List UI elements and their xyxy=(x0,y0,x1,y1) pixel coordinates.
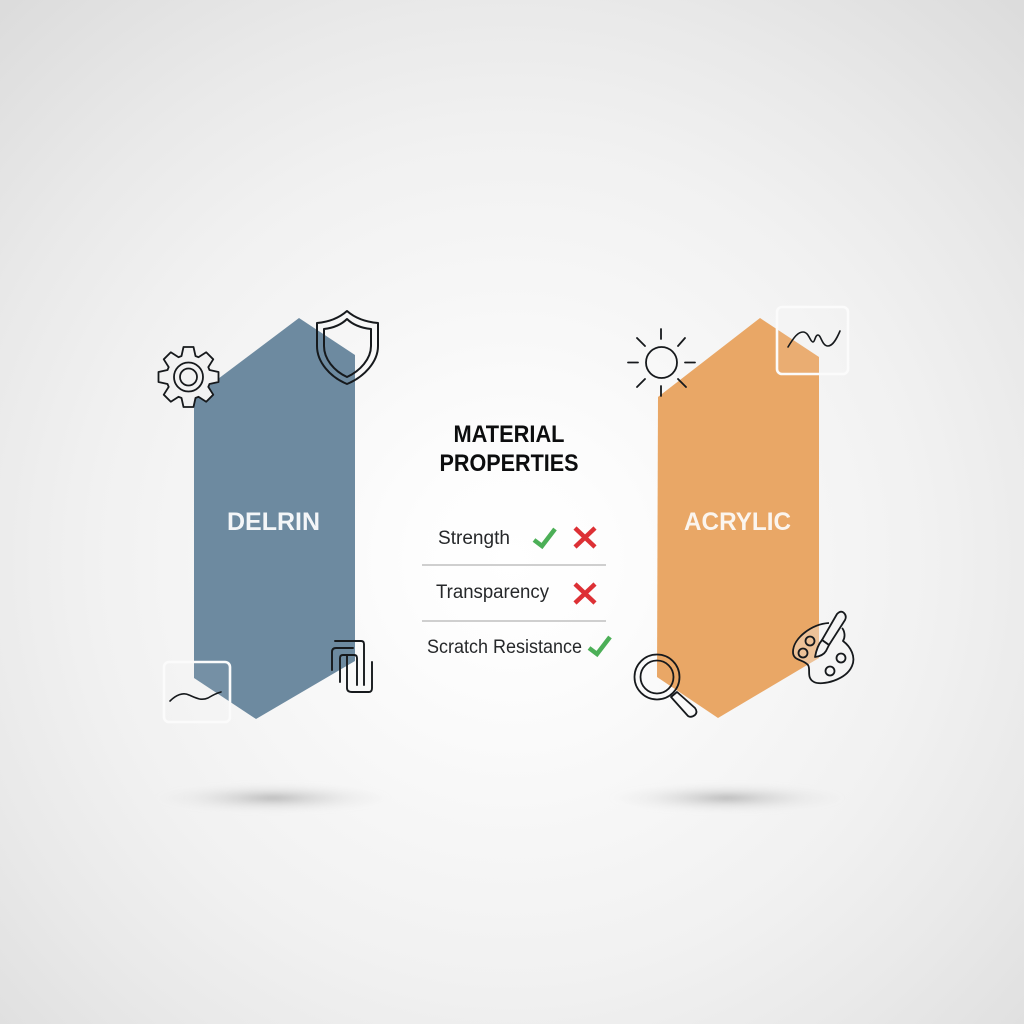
icon: magnifier xyxy=(634,654,696,717)
property row: Scratch Resistance: Scratch Resistance xyxy=(427,637,582,658)
icon: palette and brush xyxy=(793,612,853,683)
heading: material properties xyxy=(440,421,578,477)
property row: Strength xyxy=(438,528,595,549)
icon: cross xyxy=(575,528,595,547)
icon: framed scribble (Acrylic) xyxy=(777,307,848,374)
label: Acrylic: ACRYLIC xyxy=(684,508,791,536)
heading: material properties: MATERIAL xyxy=(454,421,564,448)
divider xyxy=(422,620,606,622)
icon: layered clips xyxy=(332,641,372,692)
panel: Delrin hexagon xyxy=(194,318,355,719)
divider xyxy=(422,564,606,566)
icon: framed wave (Delrin) xyxy=(164,662,230,722)
property row: Strength: Strength xyxy=(438,528,510,549)
icon: sun xyxy=(628,329,695,396)
property row: Transparency: Transparency xyxy=(436,582,549,603)
icon: cross xyxy=(575,584,595,603)
label: Delrin: DELRIN xyxy=(227,508,320,536)
shadow under Delrin xyxy=(155,783,391,813)
icon: check xyxy=(589,637,610,654)
icon: gear xyxy=(158,347,218,407)
heading: material properties: PROPERTIES xyxy=(440,450,578,477)
icon: check xyxy=(534,529,555,546)
icon: shield xyxy=(317,311,378,384)
panel: Acrylic hexagon xyxy=(657,318,819,718)
shadow under Acrylic xyxy=(609,783,845,813)
